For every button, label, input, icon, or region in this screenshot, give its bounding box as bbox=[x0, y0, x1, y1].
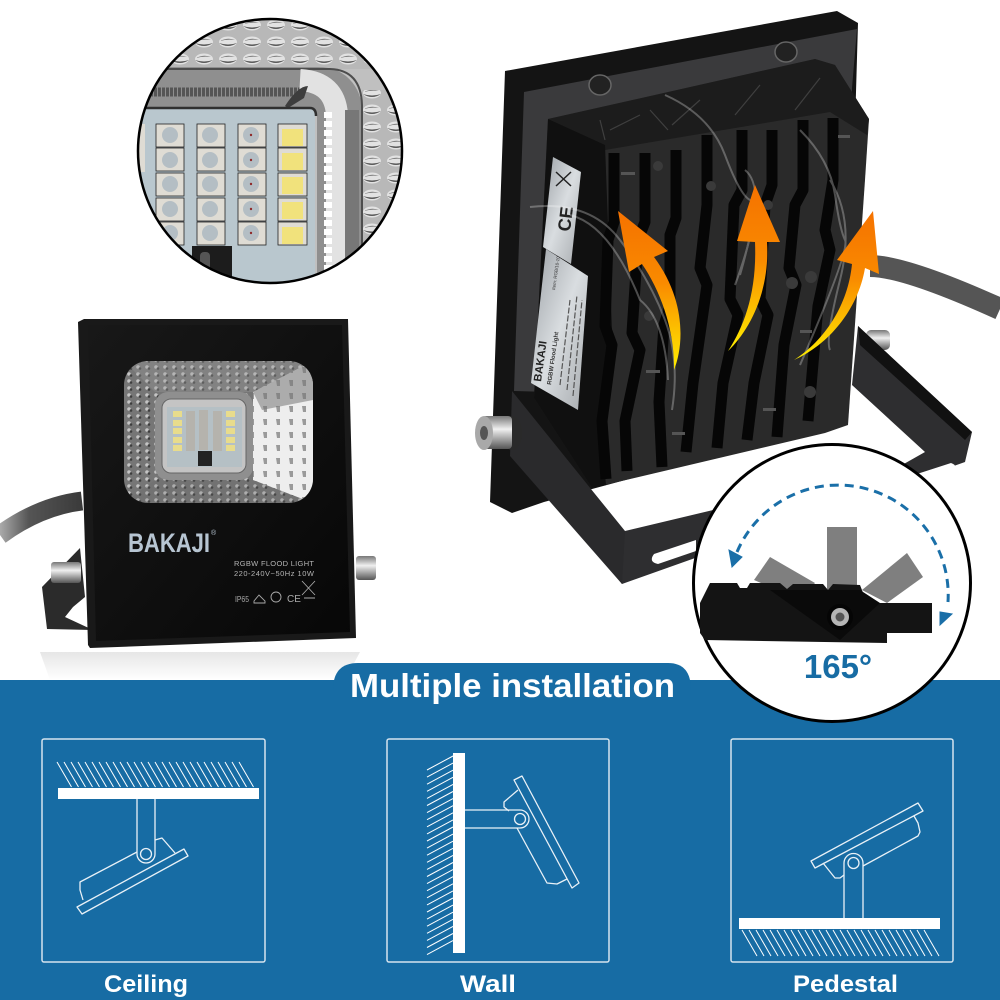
sticker: certification: CE bbox=[554, 205, 577, 232]
right bolt bbox=[356, 556, 376, 580]
panel: LED close-up circle bbox=[130, 19, 402, 290]
angle label: 165° bbox=[804, 648, 872, 685]
side-view lamp bbox=[700, 583, 932, 643]
left bolt bbox=[475, 416, 522, 450]
mounting bracket: left arm bbox=[510, 391, 625, 584]
reflector frame bbox=[130, 90, 340, 290]
panel: wall bbox=[387, 739, 609, 998]
heading: Multiple installation: Multiple installation bbox=[350, 667, 675, 704]
heat sink notches bbox=[621, 135, 850, 435]
arrow: heat flow centre bbox=[728, 185, 780, 351]
sticker: certification bbox=[543, 157, 581, 264]
right bracket bolt bbox=[866, 330, 890, 350]
ceiling bar bbox=[58, 788, 259, 799]
title tab bbox=[333, 663, 691, 705]
registered mark: ® bbox=[211, 529, 217, 537]
certification text: IP65 bbox=[235, 595, 249, 604]
ghost positions bbox=[754, 527, 923, 603]
cable: front light bbox=[0, 501, 82, 535]
sticker: product label: BAKAJI bbox=[532, 340, 550, 382]
sticker: product label bbox=[531, 249, 588, 410]
panel: back of flood light bbox=[475, 11, 972, 584]
icon: left reflection bbox=[40, 652, 360, 680]
lamp icon bbox=[811, 803, 923, 918]
label: Ceiling bbox=[104, 971, 188, 998]
panel: 165 degree rotation circle bbox=[694, 444, 970, 722]
heat sink body bbox=[534, 59, 869, 488]
back screws bbox=[644, 161, 817, 398]
mounting bracket: rear strap bbox=[600, 326, 972, 584]
lamp icon bbox=[465, 776, 579, 888]
hatch bbox=[427, 756, 453, 955]
certification marks: CE bbox=[287, 594, 301, 605]
blue band bbox=[0, 680, 1000, 1000]
screws bbox=[589, 42, 797, 95]
lamp icon bbox=[77, 799, 188, 914]
wall bar bbox=[453, 753, 465, 953]
sticker: product label: Item: RGB/10-10 bbox=[551, 256, 561, 290]
smoke bbox=[530, 95, 846, 410]
panel: front flood light bbox=[42, 319, 376, 648]
brand logo: BAKAJI bbox=[128, 528, 210, 558]
sticker: product label: RGBW Flood Light bbox=[547, 332, 560, 385]
label: Pedestal bbox=[793, 971, 898, 998]
bracket and left bolt bbox=[42, 548, 93, 630]
voltage text: 220-240V~50Hz 10W bbox=[234, 569, 315, 578]
cable: back light bbox=[870, 266, 1000, 309]
arrow: heat flow left bbox=[618, 211, 681, 370]
hatch bbox=[57, 762, 254, 787]
panel: pedestal bbox=[731, 739, 953, 998]
floor bar bbox=[739, 918, 940, 929]
reflector bbox=[124, 361, 313, 503]
product text: RGBW FLOOD LIGHT bbox=[234, 559, 314, 568]
panel: ceiling bbox=[42, 739, 265, 998]
LED chips: white column bbox=[282, 129, 303, 244]
icons: certification symbols bbox=[254, 581, 315, 603]
LED chips: RGB columns bbox=[156, 124, 307, 245]
label: Wall bbox=[460, 971, 516, 998]
pivot bolt bbox=[827, 604, 853, 630]
hatch bbox=[742, 930, 939, 956]
back plate bbox=[490, 11, 858, 513]
heat sink fins bbox=[602, 118, 833, 479]
front LED chips bbox=[173, 411, 235, 451]
arrow: heat flow right bbox=[794, 211, 879, 360]
dashed arc arrow bbox=[729, 485, 952, 625]
